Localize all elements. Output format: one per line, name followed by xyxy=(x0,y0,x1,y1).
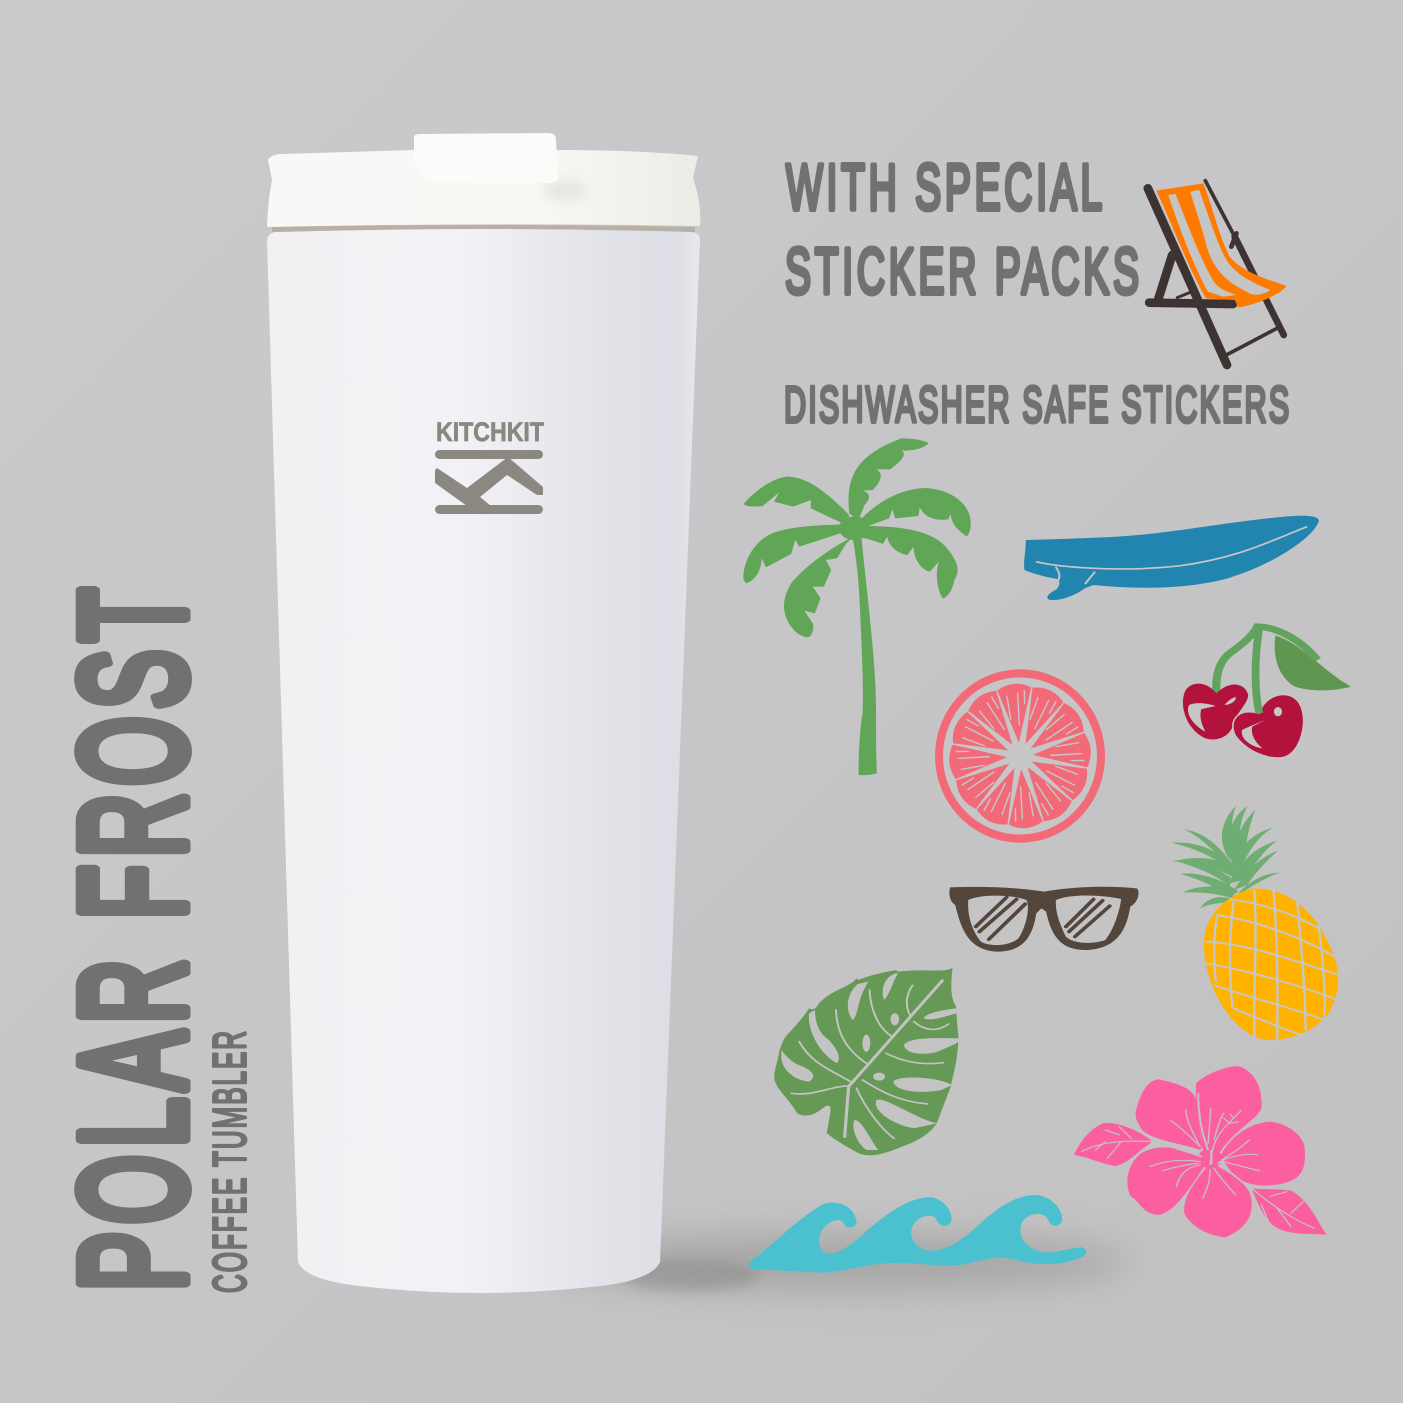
sticker: surfboard xyxy=(1024,516,1319,600)
heading: with special sticker packs: WITH SPECIAL xyxy=(786,151,1102,224)
sticker: beach chair xyxy=(1148,181,1286,365)
sticker: sunglasses xyxy=(949,887,1139,952)
sticker: hibiscus xyxy=(1074,1066,1327,1237)
hibiscus veins xyxy=(1082,1108,1315,1228)
hibiscus petals xyxy=(1127,1066,1305,1237)
tumbler body xyxy=(267,229,700,1293)
logo wordmark: KITCHKIT xyxy=(436,417,544,447)
logo xyxy=(435,417,544,514)
lid shadow under tab xyxy=(543,180,587,200)
lid tab xyxy=(414,133,558,183)
heading: with special sticker packs xyxy=(785,151,1139,308)
heading: with special sticker packs: STICKER PACKS xyxy=(785,235,1139,308)
sticker: cherries xyxy=(1183,627,1351,758)
lid xyxy=(267,150,700,227)
lid seam xyxy=(272,225,695,232)
sticker: monstera leaf xyxy=(774,968,958,1155)
logo mark xyxy=(435,450,543,514)
tumbler xyxy=(267,133,700,1293)
hibiscus leaves xyxy=(1074,1123,1327,1235)
title: polar frost: POLAR FROST xyxy=(51,588,216,1291)
subtitle: coffee tumbler: COFFEE TUMBLER xyxy=(204,1031,255,1293)
sticker: waves xyxy=(749,1195,1086,1273)
sticker: grapefruit xyxy=(939,673,1101,839)
cup shadow xyxy=(550,1234,1130,1291)
sticker: palm tree xyxy=(743,438,971,775)
subheading: dishwasher safe stickers: DISHWASHER SAFE STICKERS xyxy=(784,376,1289,433)
sticker: pineapple xyxy=(1171,806,1338,1040)
hibiscus gaps xyxy=(1152,1093,1254,1190)
